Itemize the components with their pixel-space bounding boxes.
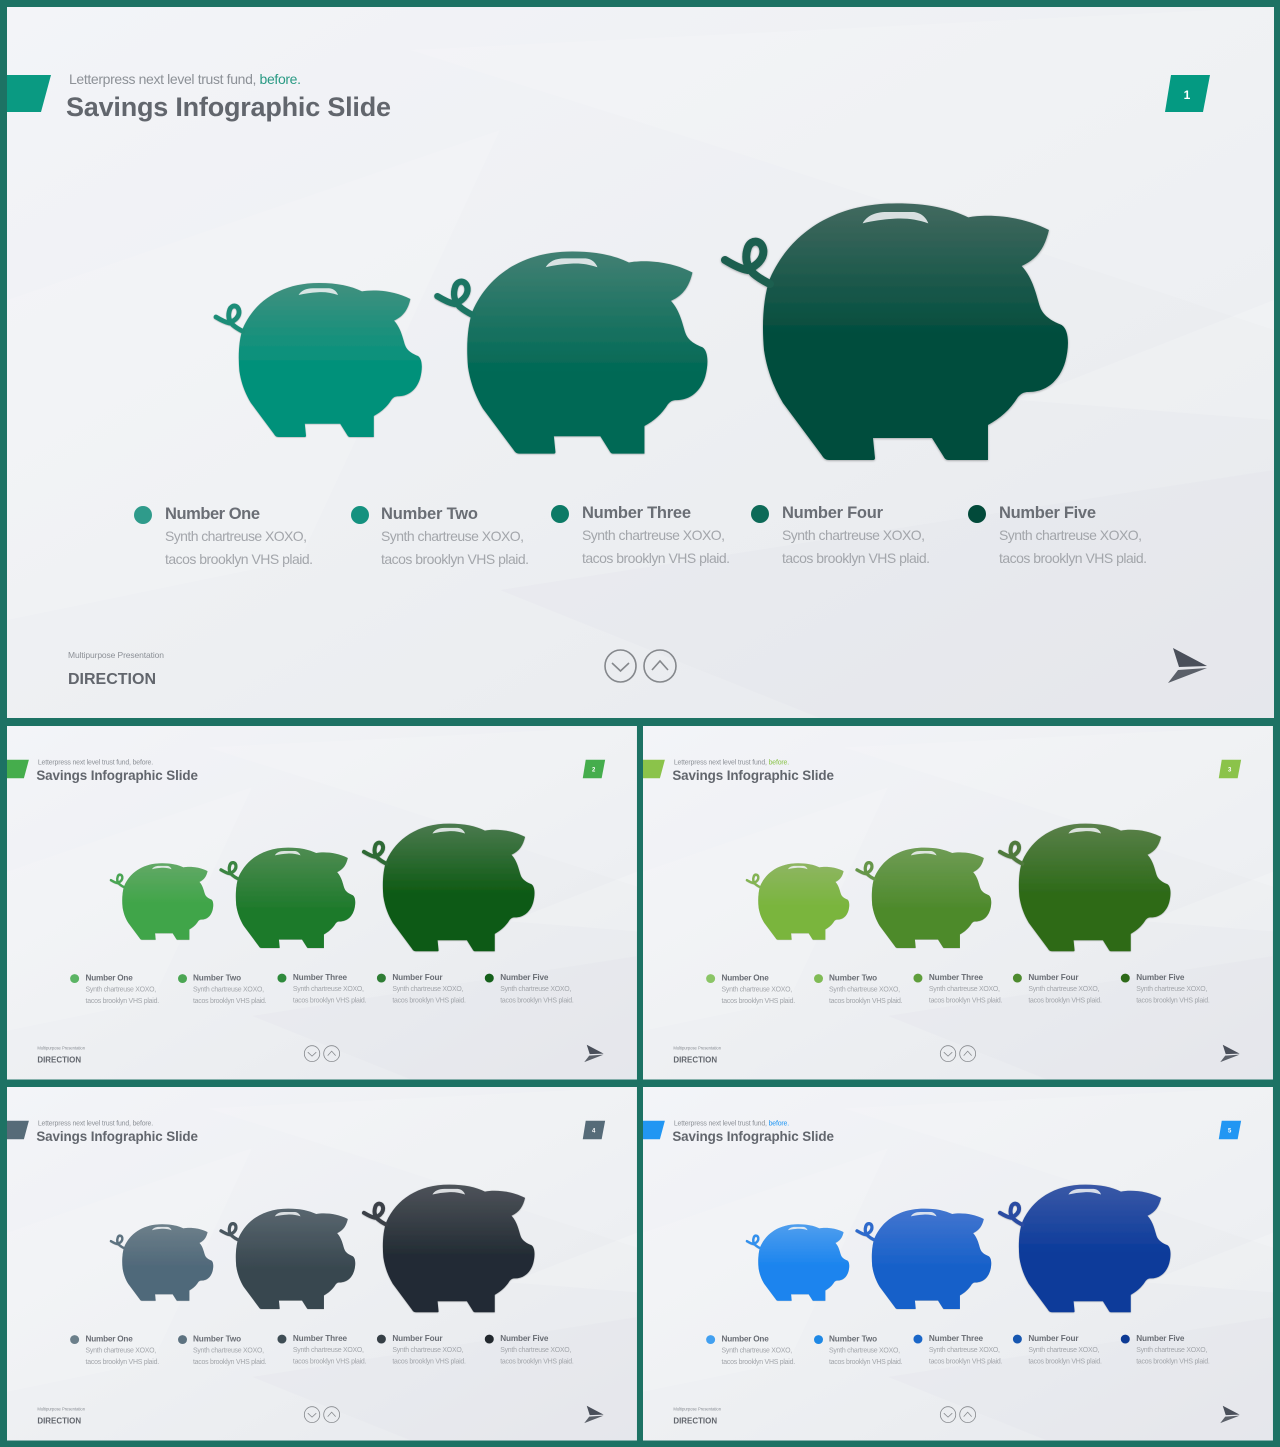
title: Savings Infographic Slide	[36, 1129, 198, 1144]
legend item three: Synth chartreuse XOXO,	[293, 986, 364, 993]
page number tab: 1	[1184, 88, 1191, 102]
legend item four: Synth chartreuse XOXO,	[392, 986, 463, 993]
legend item two	[351, 505, 529, 567]
legend item five	[1121, 1334, 1210, 1365]
legend item two: Synth chartreuse XOXO,	[193, 1348, 264, 1355]
legend item two: Number Two	[193, 974, 241, 983]
legend item one: Number One	[86, 974, 133, 983]
legend item four: Synth chartreuse XOXO,	[392, 1347, 463, 1354]
legend item one: Synth chartreuse XOXO,	[722, 1348, 792, 1355]
legend item two	[178, 1335, 267, 1366]
legend item four: Synth chartreuse XOXO,	[1028, 1347, 1099, 1354]
title: Savings Infographic Slide	[672, 1129, 834, 1144]
legend item five: Number Five	[500, 973, 549, 982]
corner tab	[7, 1121, 29, 1139]
page number tab	[1219, 760, 1241, 778]
large pig	[725, 203, 1068, 460]
legend item two: Synth chartreuse XOXO,	[193, 987, 264, 994]
page number tab	[583, 1121, 605, 1139]
legend item three: Synth chartreuse XOXO,	[293, 1347, 364, 1354]
legend item two: tacos brooklyn VHS plaid.	[829, 1359, 903, 1366]
legend item one: Number One	[86, 1335, 133, 1344]
small pig	[111, 863, 213, 940]
legend item five: Number Five	[1136, 973, 1185, 982]
legend item one: tacos brooklyn VHS plaid.	[86, 998, 159, 1005]
footer label: Multipurpose Presentation	[673, 1407, 722, 1412]
legend item one: Number One	[722, 1335, 769, 1344]
nav arrows	[940, 1407, 976, 1423]
page number tab: 2	[592, 768, 596, 774]
nav arrows	[304, 1046, 340, 1062]
footer label: DIRECTION	[37, 1417, 81, 1426]
legend item three: Number Three	[929, 1334, 984, 1343]
legend item one: Synth chartreuse XOXO,	[722, 987, 792, 994]
panel: slide 4 slate	[7, 1087, 637, 1441]
small pig	[747, 863, 849, 940]
legend item one	[70, 974, 159, 1005]
corner tab	[643, 1121, 665, 1139]
panel: slide 1 teal	[7, 7, 1274, 718]
legend item three: tacos brooklyn VHS plaid.	[582, 550, 730, 566]
large pig	[1000, 1185, 1171, 1312]
legend item one	[706, 1335, 795, 1366]
legend item five: Number Five	[999, 504, 1096, 522]
legend item four: Synth chartreuse XOXO,	[1028, 986, 1099, 993]
legend item one	[706, 974, 795, 1005]
subtitle: Letterpress next level trust fund, before.	[69, 71, 301, 87]
legend item five: tacos brooklyn VHS plaid.	[500, 1358, 574, 1365]
legend item two: Number Two	[829, 1335, 877, 1344]
legend item three: Number Three	[293, 973, 348, 982]
footer label: DIRECTION	[673, 1056, 717, 1065]
legend item one: tacos brooklyn VHS plaid.	[86, 1359, 159, 1366]
legend item four: Number Four	[392, 1334, 443, 1343]
legend item two: tacos brooklyn VHS plaid.	[829, 998, 903, 1005]
legend item two: Synth chartreuse XOXO,	[829, 1348, 900, 1355]
page number tab	[1219, 1121, 1241, 1139]
corner tab	[643, 760, 665, 778]
medium pig	[221, 848, 355, 948]
legend item two	[178, 974, 267, 1005]
legend item five: Synth chartreuse XOXO,	[1136, 1347, 1207, 1354]
footer label	[68, 650, 164, 688]
medium pig	[221, 1209, 355, 1309]
footer label	[673, 1046, 722, 1065]
legend item five: tacos brooklyn VHS plaid.	[1136, 1358, 1210, 1365]
legend item five	[485, 973, 574, 1004]
nav arrows	[605, 650, 676, 682]
legend item two: Number Two	[193, 1335, 241, 1344]
legend item four: Number Four	[1028, 1334, 1079, 1343]
title: Savings Infographic Slide	[36, 768, 198, 783]
legend item two: Synth chartreuse XOXO,	[381, 528, 524, 544]
footer label: Multipurpose Presentation	[68, 650, 164, 660]
footer label: Multipurpose Presentation	[673, 1046, 722, 1051]
legend item three: tacos brooklyn VHS plaid.	[293, 997, 367, 1004]
legend item three: Number Three	[293, 1334, 348, 1343]
legend item three	[913, 1334, 1003, 1365]
legend item two: Synth chartreuse XOXO,	[829, 987, 900, 994]
page number tab: 5	[1228, 1129, 1232, 1135]
legend item two: Number Two	[829, 974, 877, 983]
legend item five: Number Five	[1136, 1334, 1185, 1343]
legend item three: Synth chartreuse XOXO,	[929, 986, 1000, 993]
legend item four: tacos brooklyn VHS plaid.	[1028, 997, 1102, 1004]
nav arrows	[940, 1046, 976, 1062]
icon: paper plane	[1220, 1045, 1240, 1062]
footer label	[37, 1046, 86, 1065]
page number tab	[583, 760, 605, 778]
legend item one	[134, 505, 313, 567]
legend item five: tacos brooklyn VHS plaid.	[500, 997, 574, 1004]
legend item two	[814, 974, 903, 1005]
subtitle: Letterpress next level trust fund, before.	[674, 1120, 789, 1127]
legend item four: tacos brooklyn VHS plaid.	[392, 997, 466, 1004]
legend item three	[913, 973, 1003, 1004]
legend item five: Synth chartreuse XOXO,	[1136, 986, 1207, 993]
legend item three: Number Three	[582, 504, 691, 522]
legend item two: tacos brooklyn VHS plaid.	[193, 998, 267, 1005]
legend item four: Number Four	[392, 973, 443, 982]
legend item three: Number Three	[929, 973, 984, 982]
subtitle: Letterpress next level trust fund, before.	[38, 1120, 153, 1127]
small pig	[111, 1224, 213, 1301]
legend item two	[814, 1335, 903, 1366]
legend item two: tacos brooklyn VHS plaid.	[381, 551, 529, 567]
legend item one: Synth chartreuse XOXO,	[86, 987, 156, 994]
legend item three	[277, 1334, 367, 1365]
subtitle: Letterpress next level trust fund, before.	[674, 759, 789, 766]
footer label	[37, 1407, 86, 1426]
legend item one: Synth chartreuse XOXO,	[165, 528, 307, 544]
legend item five: Synth chartreuse XOXO,	[500, 1347, 571, 1354]
page number tab: 4	[592, 1129, 596, 1135]
icon: paper plane	[584, 1045, 604, 1062]
legend item four: tacos brooklyn VHS plaid.	[392, 1358, 466, 1365]
page number tab: 3	[1228, 768, 1232, 774]
legend item four	[377, 973, 466, 1004]
legend item three: tacos brooklyn VHS plaid.	[929, 1358, 1003, 1365]
legend item one: tacos brooklyn VHS plaid.	[722, 1359, 795, 1366]
medium pig	[437, 252, 707, 454]
subtitle: Letterpress next level trust fund, before.	[38, 759, 153, 766]
legend item four: tacos brooklyn VHS plaid.	[1028, 1358, 1102, 1365]
legend item one: Synth chartreuse XOXO,	[86, 1348, 156, 1355]
legend item five: tacos brooklyn VHS plaid.	[1136, 997, 1210, 1004]
legend item four: Synth chartreuse XOXO,	[782, 527, 925, 543]
small pig	[747, 1224, 849, 1301]
footer label: DIRECTION	[68, 671, 156, 688]
legend item four	[1013, 973, 1102, 1004]
legend item one: tacos brooklyn VHS plaid.	[722, 998, 795, 1005]
legend item one	[70, 1335, 159, 1366]
legend item three: Synth chartreuse XOXO,	[929, 1347, 1000, 1354]
legend item one: Number One	[165, 505, 260, 523]
legend item one: Number One	[722, 974, 769, 983]
legend item four	[1013, 1334, 1102, 1365]
legend item four: Number Four	[1028, 973, 1079, 982]
legend item five	[1121, 973, 1210, 1004]
medium pig	[857, 1209, 991, 1309]
legend item two: Number Two	[381, 505, 478, 523]
legend item one: tacos brooklyn VHS plaid.	[165, 551, 313, 567]
large pig	[364, 1185, 535, 1312]
legend item three: tacos brooklyn VHS plaid.	[293, 1358, 367, 1365]
legend item five	[485, 1334, 574, 1365]
legend item five: tacos brooklyn VHS plaid.	[999, 550, 1147, 566]
panel: slide 3 light green	[643, 726, 1273, 1080]
legend item four	[377, 1334, 466, 1365]
legend item four	[751, 504, 930, 566]
footer label: DIRECTION	[37, 1056, 81, 1065]
page number tab	[1165, 75, 1210, 112]
small pig	[216, 283, 422, 437]
legend item four: Number Four	[782, 504, 884, 522]
title: Savings Infographic Slide	[66, 92, 391, 122]
footer label: Multipurpose Presentation	[37, 1046, 86, 1051]
nav arrows	[304, 1407, 340, 1423]
icon: paper plane	[1168, 648, 1207, 683]
panel: slide 2 green	[7, 726, 637, 1080]
icon: paper plane	[1220, 1406, 1240, 1423]
footer label: DIRECTION	[673, 1417, 717, 1426]
legend item three	[277, 973, 367, 1004]
footer label	[673, 1407, 722, 1426]
legend item five	[968, 504, 1147, 566]
panel: slide 5 blue	[643, 1087, 1273, 1441]
legend item three	[551, 504, 730, 566]
large pig	[1000, 824, 1171, 951]
large pig	[364, 824, 535, 951]
legend item five: Number Five	[500, 1334, 549, 1343]
corner tab	[7, 760, 29, 778]
corner tab	[7, 75, 51, 112]
legend item five: Synth chartreuse XOXO,	[500, 986, 571, 993]
legend item four: tacos brooklyn VHS plaid.	[782, 550, 930, 566]
title: Savings Infographic Slide	[672, 768, 834, 783]
legend item five: Synth chartreuse XOXO,	[999, 527, 1142, 543]
legend item three: Synth chartreuse XOXO,	[582, 527, 725, 543]
legend item two: tacos brooklyn VHS plaid.	[193, 1359, 267, 1366]
medium pig	[857, 848, 991, 948]
legend item three: tacos brooklyn VHS plaid.	[929, 997, 1003, 1004]
footer label: Multipurpose Presentation	[37, 1407, 86, 1412]
icon: paper plane	[584, 1406, 604, 1423]
